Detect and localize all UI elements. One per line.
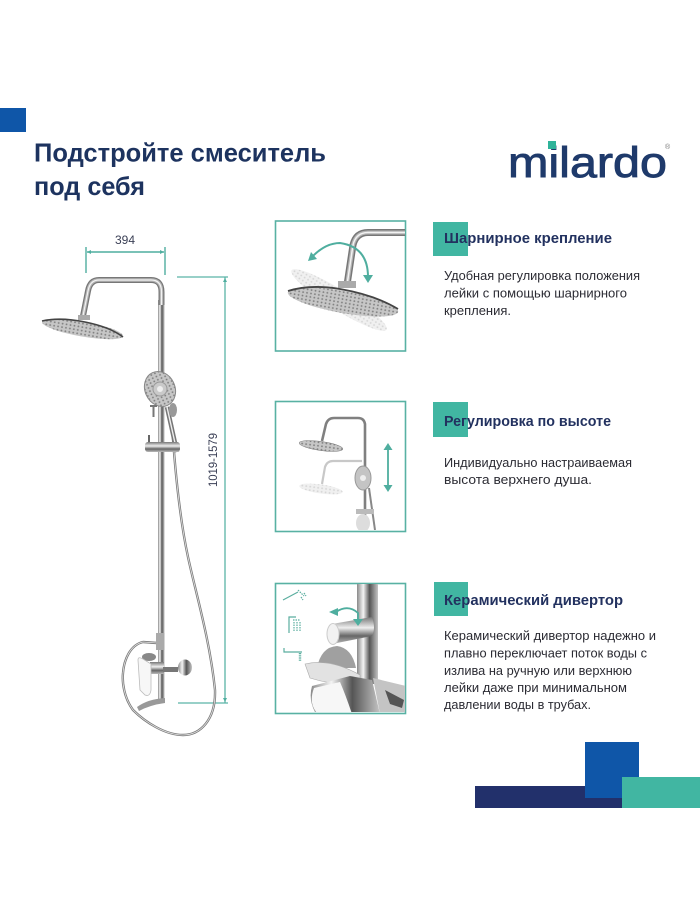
text: swivel joint: крепления. [444,303,511,318]
arrow: rotation [308,243,373,283]
shower head with swivel positions [286,232,405,338]
text: ceramic diverter: излива на ручную или верхнюю [444,663,632,678]
heading: height adjustment [433,402,611,437]
heading: swivel joint [433,222,612,256]
slider bracket [145,435,180,452]
corner accent square [0,108,26,132]
heading: ceramic diverter [434,582,623,616]
mixer close-up [305,584,406,714]
mixer [137,633,192,711]
title: Подстройте смеситель [34,138,326,168]
hose [123,425,215,735]
title: под себя [34,171,145,201]
dimension: height 1019-1579 [177,277,228,703]
panel: swivel joint [276,221,406,351]
text: ceramic diverter: лейки даже при минимальном [444,680,627,695]
head collar [78,315,90,320]
text: swivel joint: Удобная регулировка положения [444,268,640,283]
text: ceramic diverter: Керамический дивертор надежно и [444,628,656,643]
dimension: head width 394: 394 [115,233,135,247]
decorative corner blocks [475,742,700,808]
panel: height adjustment [276,402,406,532]
text: ceramic diverter [444,628,656,712]
logo: milardo: ® [665,143,671,151]
text: swivel joint [444,268,640,318]
text: ceramic diverter: плавно переключает поток воды с [444,646,647,660]
text: height adjustment [444,455,632,487]
hand shower [139,366,181,452]
dimension: height 1019-1579: 1019-1579 [206,433,220,487]
overhead shower head [41,314,124,344]
product: shower system [41,280,215,735]
arrow: up and down [384,443,392,492]
icons: spray modes [283,590,306,661]
riser pipe [158,300,164,700]
title [34,138,326,201]
logo: milardo: milardo [508,139,667,187]
text: swivel joint: лейки с помощью шарнирного [444,286,627,300]
panel: ceramic diverter [276,584,406,714]
dimension: head width 394 [86,233,165,275]
text: ceramic diverter: давлении воды в трубах. [444,697,591,712]
small hook [150,406,157,417]
overhead arm [83,280,162,316]
text: height adjustment: высота верхнего душа. [444,472,592,487]
heading: swivel joint: Шарнирное крепление [444,231,612,247]
arrow: diverter turn [329,608,363,626]
heading: height adjustment: Регулировка по высоте [444,414,611,430]
heading: ceramic diverter: Керамический дивертор [444,593,623,609]
text: height adjustment: Индивидуально настраиваемая [444,455,632,470]
upper and lower shower positions [299,418,375,532]
